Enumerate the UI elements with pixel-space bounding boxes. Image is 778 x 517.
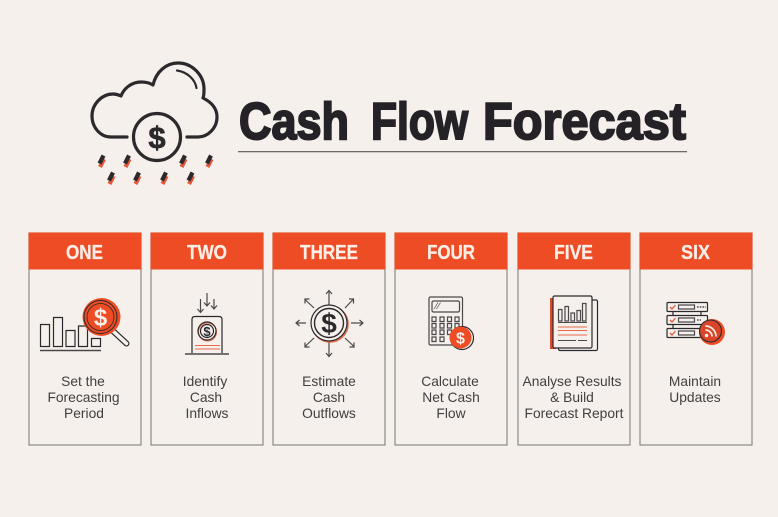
step label: Maintain — [669, 374, 721, 389]
panel: step one: ONE — [66, 242, 103, 264]
title: Flow — [371, 93, 468, 151]
icon: document receiving arrows: $ — [203, 324, 211, 339]
panel: step two — [150, 232, 264, 445]
step label: Cash — [313, 390, 345, 405]
panel: step six: SIX — [681, 242, 711, 264]
title — [239, 93, 686, 151]
icon: cloud with dollar coin and rain — [92, 63, 217, 184]
title underline — [238, 151, 687, 152]
title: Cash — [239, 93, 349, 151]
step label: Cash — [190, 390, 222, 405]
icon: document receiving arrows — [185, 293, 229, 354]
step label: Analyse Results — [523, 374, 622, 389]
step label: Forecasting — [47, 390, 120, 405]
step label: Forecast Report — [525, 406, 624, 421]
icon: bar chart under magnifier: $ — [94, 304, 108, 332]
step label: Updates — [669, 390, 721, 405]
icon: calculator with dollar coin — [429, 297, 474, 350]
step label: Outflows — [302, 406, 356, 421]
step label: Inflows — [186, 406, 229, 421]
step label: Set the — [61, 374, 105, 389]
panel: step four — [394, 232, 508, 445]
step label: Calculate — [421, 374, 479, 389]
step label: Period — [64, 406, 104, 421]
icon: calculator with dollar coin: $ — [456, 330, 465, 348]
icon: bar chart under magnifier — [40, 298, 126, 350]
panel: step three: THREE — [300, 242, 358, 264]
panel: step three — [272, 232, 386, 445]
step label: Identify — [183, 374, 227, 389]
icon: server stack with RSS badge — [667, 302, 725, 345]
icon: coin with outward arrows — [296, 290, 363, 357]
panel: step two: TWO — [187, 242, 227, 264]
step label: Estimate — [302, 374, 356, 389]
panel: step four: FOUR — [427, 242, 475, 264]
step label: & Build — [550, 390, 594, 405]
panel: step six — [640, 232, 752, 445]
step label: Flow — [436, 406, 466, 421]
icon: report with chart — [550, 296, 598, 350]
panel: step one — [28, 232, 142, 445]
step label: Net Cash — [422, 390, 480, 405]
panel: step five: FIVE — [554, 242, 593, 264]
title: Forecast — [483, 93, 686, 151]
icon: coin with outward arrows: $ — [321, 308, 337, 339]
icon: cloud with dollar coin and rain: $ — [148, 120, 166, 155]
panel: step five — [518, 232, 630, 445]
